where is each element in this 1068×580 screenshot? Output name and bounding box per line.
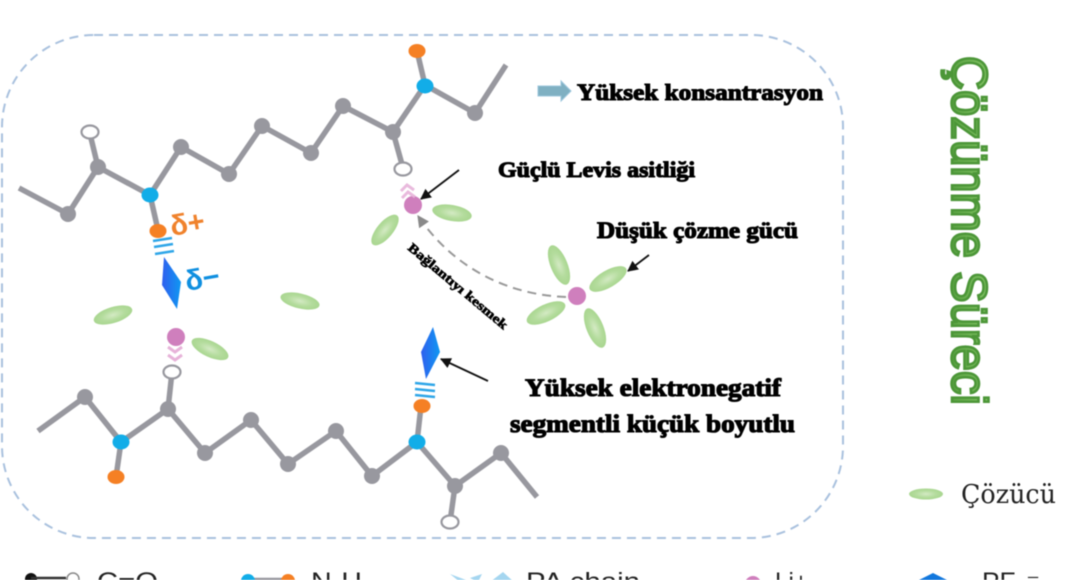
upper polymer chain (19, 44, 506, 238)
legend: solvent (909, 480, 1056, 510)
label: high electronegative small segment: Yüksek elektronegatif (525, 375, 782, 402)
label: high electronegative small segment: segmentli küçük boyutlu (510, 411, 795, 438)
lithium ion, left (167, 328, 185, 360)
lower polymer chain (38, 366, 537, 528)
label: high electronegative small segment (510, 375, 795, 438)
PF6 anion, right (421, 327, 440, 379)
icon: high concentration arrow (538, 81, 571, 101)
free solvents (92, 289, 321, 365)
arrow: dashed desolvation path (418, 216, 566, 297)
legend: PA chain (450, 568, 640, 580)
solvated lithium cluster (523, 242, 630, 351)
title: dissolution process (vertical): Çözünme Süreci (941, 56, 997, 405)
delta minus label: δ− (183, 260, 222, 298)
legend: Li+ (745, 568, 808, 580)
legend: PF6- (915, 568, 1040, 580)
legend: C=O (25, 568, 158, 580)
label: high concentration: Yüksek konsantrasyon (577, 80, 823, 105)
legend: N-H (241, 568, 362, 580)
hydrogen bond lines, lower (415, 383, 435, 397)
label: low solvating power: Düşük çözme gücü (597, 218, 798, 243)
arrow: low solvating power pointer (628, 255, 649, 271)
lithium ion with solvents, top (367, 185, 473, 250)
label: strong Lewis acidity: Güçlü Levis asitliği (498, 157, 695, 182)
arrow: high electronegativity pointer (441, 359, 488, 381)
PF6 anion, left (162, 257, 181, 309)
delta plus label: δ+ (168, 205, 207, 243)
hydrogen bond lines, upper (153, 238, 174, 254)
panel: dashed process frame (2, 35, 843, 538)
legend: solvent: Çözücü (961, 480, 1056, 510)
arrow: Lewis acidity pointer (421, 170, 459, 199)
label: cutting the bond: Bağlantıyı kesmek (405, 240, 512, 333)
